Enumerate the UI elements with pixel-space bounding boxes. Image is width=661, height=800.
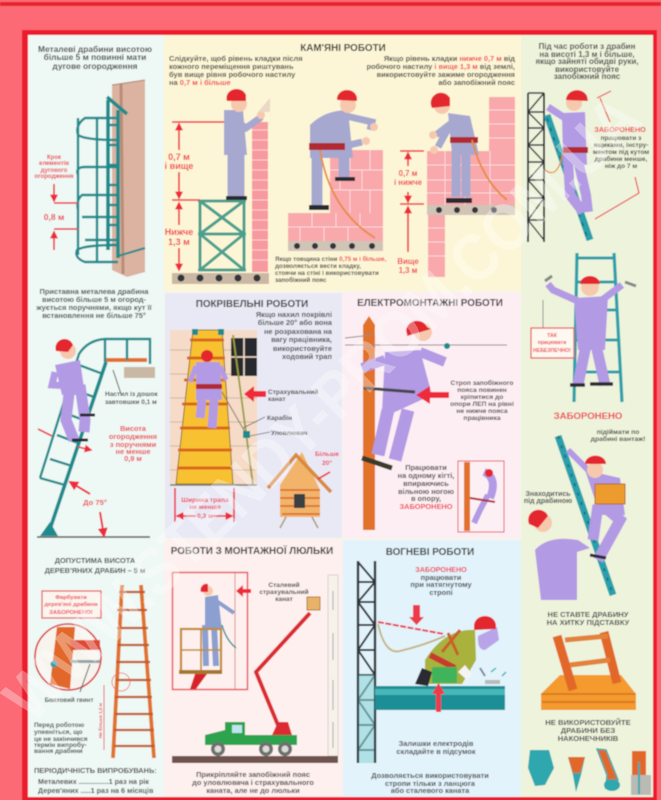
text: electrode rule xyxy=(396,739,476,756)
text: portable metal ladder rule: жується поручнями, якщо кут її xyxy=(35,303,153,312)
text: lifting load forbidden: підіймати по xyxy=(597,428,639,436)
illustration: workers with load on ladder xyxy=(528,436,625,600)
text: cradle rule: до уловлювача і страхувального xyxy=(192,778,314,787)
label: steel safety cable xyxy=(259,581,309,603)
label: cage element pitch xyxy=(34,155,78,250)
label: angle up to 75 degrees xyxy=(70,482,107,536)
text: harness rule on ladder: запобіжний пояс xyxy=(554,72,621,81)
illustration: ladder on unstable box xyxy=(541,632,636,710)
text: test date rule: термін випробу- xyxy=(34,741,87,749)
text: no ladder tips: ДРАБИНИ БЕЗ xyxy=(561,726,616,735)
heading: fire work: ВОГНЕВІ РОБОТИ xyxy=(386,547,474,558)
illustration: ladder with platform xyxy=(37,339,155,537)
text: wall thickness note: Якщо товщина стіни 0,75 м і більше, xyxy=(275,256,386,263)
text: metal ladder cage rule: Металеві драбини висотою xyxy=(38,44,152,54)
text: forbidden ladder work xyxy=(593,125,649,170)
heading: stone work: КАМ'ЯНІ РОБОТИ xyxy=(300,43,386,54)
text: test periodicity: Дерев'яних .....1 раз на 6 місяців xyxy=(38,786,154,795)
label: cage element pitch: дугового xyxy=(41,168,68,174)
text: one climber forbidden: впираючись xyxy=(403,479,449,488)
sign: dangerous xyxy=(531,328,574,358)
text: test periodicity xyxy=(34,766,157,795)
label: plank deck xyxy=(105,390,158,406)
dimension: 0.7 m and above, under 1.3 m: 1,3 м xyxy=(168,237,190,247)
sign: dangerous: ТАК xyxy=(547,333,558,339)
text: sling material rule: або сталевого каната xyxy=(391,786,470,795)
callout: painting forbidden xyxy=(42,591,101,618)
illustration: worker with harness at low wall xyxy=(427,93,515,277)
text: taut sling forbidden: працювати xyxy=(421,573,462,582)
label: railing height: Висота xyxy=(120,424,147,433)
text: lifting load forbidden: драбині вантаж! xyxy=(591,435,645,443)
text: under ladder forbidden: Знаходитись xyxy=(525,491,571,498)
text: shaky base xyxy=(547,610,630,627)
panel: cradle work background xyxy=(164,540,342,797)
label: cage element pitch: огородження xyxy=(34,174,74,180)
text: sling rule: Строп запобіжного xyxy=(451,379,513,387)
dimension: 0.7 m and above, under 1.3 m: Нижче xyxy=(165,227,193,237)
text: stone work left rule: Слідкуйте, щоб рівень кладки після xyxy=(169,54,303,63)
callout: safety rope arrow xyxy=(244,386,318,403)
icon: ladder joint magnified xyxy=(35,624,101,692)
text: forbidden ladder work: ЗАБОРОНЕНО xyxy=(594,125,646,134)
panel: fire work background xyxy=(343,540,521,797)
text: test date rule: Перед роботою xyxy=(34,721,85,729)
text: harness rule on ladder: на висоті 1,3 м і більше, xyxy=(539,50,635,59)
label: plank deck: Настил із дошок xyxy=(105,390,158,398)
text: taut sling forbidden: при натягнутому xyxy=(410,580,473,589)
text: sling rule: опори ЛЕП на рівні xyxy=(450,400,514,408)
text: roof rule: використовуйте xyxy=(273,344,332,353)
text: portable metal ladder rule: встановлення не більше 75° xyxy=(42,311,146,320)
dimension: walkway width xyxy=(175,488,234,522)
text: forbidden ladder work: ящиками, інстру- xyxy=(594,141,648,149)
callout: carabiner: Карабін xyxy=(267,414,292,422)
dimension: walkway width: не менше xyxy=(189,504,221,511)
text: sling rule xyxy=(450,379,514,422)
label: railing height xyxy=(109,424,157,463)
text: test date rule: вання драбини xyxy=(34,747,83,755)
dimension: 0.7 m and above, under 1.3 m: і вище xyxy=(165,161,193,171)
text: electrode rule: Залишки електродів xyxy=(399,739,474,748)
inset: forbidden pole climbing xyxy=(458,461,504,532)
label: railing height: огородження xyxy=(109,432,157,441)
text: sling material rule xyxy=(371,771,489,795)
text: under ladder forbidden: під драбиною xyxy=(524,497,572,505)
heading: electrical work: ЕЛЕКТРОМОНТАЖНІ РОБОТИ xyxy=(357,298,503,309)
label: steel safety cable: канат xyxy=(275,596,293,603)
text: harness rule on ladder xyxy=(535,42,639,81)
dimension: 0.7 m and lower, above 1.3 m: Вище xyxy=(397,257,419,266)
heading: wooden ladder height: ДЕРЕВ'ЯНИХ ДРАБИН – 5 м xyxy=(45,566,145,575)
dimension: 0.7 m and lower, above 1.3 m: 1,3 м xyxy=(399,266,418,275)
text: taut sling forbidden: стропі xyxy=(429,588,453,597)
text: sling rule: не нижче пояса xyxy=(456,408,508,415)
text: stone work left rule: кожного переміщення риштувань xyxy=(169,62,294,71)
text: stone work right rule: використовуйте зажиме огородження xyxy=(377,70,515,79)
heading: wooden ladder height xyxy=(45,556,145,575)
sign: dangerous: працювати xyxy=(538,340,566,346)
text: no ladder tips: НАКОНЕЧНИКІВ xyxy=(558,734,619,743)
text: harness rule on ladder: використовуйте xyxy=(555,65,620,74)
text: roof rule: Якщо нахил покрівлі xyxy=(256,310,332,319)
text: wall thickness note xyxy=(275,256,386,284)
text: metal ladder cage rule: дугове огородження xyxy=(52,61,138,71)
dimension: 0.7 m and lower, above 1.3 m: 0,7 м xyxy=(399,169,418,178)
text: one climber forbidden: на одному кігті, xyxy=(398,471,454,480)
illustration: bucket truck and building xyxy=(172,575,338,763)
text: portable metal ladder rule: висотою більше 5 м огород- xyxy=(42,295,146,304)
illustration: roof with walkway ladder and worker xyxy=(170,329,257,485)
icons: ladder tips xyxy=(528,749,651,795)
label: slope over 20 degrees: Більше xyxy=(315,450,339,458)
top red stripe xyxy=(0,2,661,6)
text: stone work right rule: або запобіжний пояс xyxy=(438,78,515,87)
label: cage element pitch: Крок xyxy=(47,155,61,161)
label: bolt: Болтовий гвинт xyxy=(45,697,93,704)
text: cradle rule: каната, але не до люльки xyxy=(206,786,300,795)
callout: rope grab xyxy=(250,430,308,437)
text: harness rule on ladder: якщо зайняті обидві руки, xyxy=(535,57,639,66)
icon: small log house xyxy=(268,452,331,528)
text: lifting load forbidden xyxy=(591,428,645,443)
text: roof rule xyxy=(256,310,333,361)
text: stone work left rule: на 0,7 м і більше xyxy=(169,78,231,87)
illustration: wooden ladder: Не більше 1,5 м xyxy=(97,702,103,738)
text: no ladder tips xyxy=(545,718,631,743)
label: slope over 20 degrees: 20° xyxy=(322,459,332,467)
text: stone work right rule xyxy=(366,54,515,87)
text: metal ladder cage rule: більше 5 м повинні мати xyxy=(44,52,146,62)
text: cradle rule xyxy=(192,770,314,795)
callout: painting forbidden: ЗАБОРОНЕНО! xyxy=(49,610,93,616)
label: plank deck: завтовшки 0,1 м xyxy=(105,399,157,406)
text: one climber forbidden xyxy=(398,463,455,511)
text: test date rule: упевніться, що xyxy=(34,728,82,736)
callout: rope grab: Уловлювач xyxy=(271,430,308,437)
label: railing height: не менше xyxy=(116,447,150,456)
callout: painting forbidden: Фарбувати xyxy=(55,594,87,601)
dimension: 0.7 m and above, under 1.3 m xyxy=(165,122,224,270)
panel: roof work background xyxy=(165,293,342,538)
callout: painting forbidden: дерев'яні драбини xyxy=(44,601,98,608)
text: roof rule: вагу працівника, xyxy=(271,335,332,344)
text: metal ladder cage rule xyxy=(38,44,152,71)
text: roof rule: не розрахована на xyxy=(264,327,333,336)
dimension: walkway width: Ширина трапа xyxy=(181,497,229,504)
label: cage element pitch: елементів xyxy=(39,161,69,167)
text: test periodicity: Металевих ...............1 раз на рік xyxy=(38,777,149,786)
text: sling rule: кріпитися до xyxy=(461,393,503,401)
callout: safety rope arrow: Страхувальний xyxy=(268,388,318,396)
text: stone work left rule xyxy=(169,54,303,87)
text: forbidden ladder work: працювати з xyxy=(601,135,642,142)
label: slope over 20 degrees xyxy=(315,450,339,479)
marker: railing height xyxy=(38,429,91,450)
text: wall thickness note: дозволяється вести кладку, xyxy=(275,263,361,270)
label: angle up to 75 degrees: До 75° xyxy=(83,498,107,507)
text: no ladder tips: НЕ ВИКОРИСТОВУЙТЕ xyxy=(545,718,631,727)
dimension: 0.7 m and above, under 1.3 m: 0,7 м xyxy=(168,152,190,162)
text: stone work right rule: робочого настилу і вище 1,3 м від землі, xyxy=(366,62,515,71)
text: portable metal ladder rule xyxy=(35,287,153,320)
panel: left ladders background xyxy=(28,35,164,797)
text: one climber forbidden: Працювати xyxy=(405,463,447,472)
label: steel safety cable: страхувальний xyxy=(259,588,309,596)
text: stone work right rule: Якщо рівень кладки нижче 0,7 м від xyxy=(384,54,515,63)
panel: stone work background xyxy=(164,35,521,291)
text: wall thickness note: запобіжний пояс xyxy=(275,277,327,284)
text: roof rule: більше 20° або вона xyxy=(258,318,333,327)
text: electrode rule: складайте в підсумок xyxy=(396,747,476,756)
text: test date rule: це не закінчився xyxy=(34,735,88,743)
text: one climber forbidden: вільною ногою xyxy=(398,487,455,496)
callout: carabiner xyxy=(243,414,292,428)
text: sling rule: працівника xyxy=(463,414,501,422)
callout: safety rope arrow: канат xyxy=(268,396,286,403)
panel: right ladders background xyxy=(521,35,653,797)
text: forbidden ladder work: ментом під кутом xyxy=(593,148,649,156)
dimension: walkway width: 0,3 м xyxy=(197,513,213,520)
dimension: 0.7 m and lower, above 1.3 m xyxy=(394,151,424,275)
sign: dangerous: НЕБЕЗПЕЧНО! xyxy=(533,348,571,354)
heading: roof work: ПОКРІВЕЛЬНІ РОБОТИ xyxy=(196,299,308,310)
illustration: worker on scaffold xyxy=(172,89,270,284)
text: roof rule: ходовий трап xyxy=(282,352,332,361)
illustration: caged ladder on I-beam xyxy=(76,80,145,277)
text: portable metal ladder rule: Приставна металева драбина xyxy=(40,287,149,296)
text: shaky base: НЕ СТАВТЕ ДРАБИНУ xyxy=(547,610,629,619)
illustration: welder on beam xyxy=(358,561,506,763)
dimension: 0.7 m and lower, above 1.3 m: і нижче xyxy=(394,178,423,187)
heading: forbidden: ЗАБОРОНЕНО xyxy=(554,411,623,422)
text: forbidden ladder work: драбини менше, xyxy=(595,155,648,163)
heading: wooden ladder height: ДОПУСТИМА ВИСОТА xyxy=(55,556,136,565)
text: test periodicity: ПЕРІОДИЧНІСТЬ ВИПРОБУВАНЬ: xyxy=(34,766,157,775)
panel: electrical work background xyxy=(343,293,520,538)
text: under ladder forbidden xyxy=(524,491,572,505)
illustration: worker on ladder against tower xyxy=(528,90,639,242)
label: steel safety cable: Сталевий xyxy=(268,581,300,589)
text: sling material rule: Дозволяється використовувати xyxy=(371,771,489,780)
illustration: worker hammering on ladder xyxy=(543,253,636,402)
illustration: worker on utility pole xyxy=(345,316,507,530)
label: cage element pitch: 0,8 м xyxy=(44,212,64,222)
label: railing height: 0,9 м xyxy=(124,454,142,463)
illustration: wooden ladder xyxy=(97,585,155,758)
text: one climber forbidden: в опору, xyxy=(411,494,441,503)
text: taut sling forbidden: ЗАБОРОНЕНО xyxy=(415,565,467,574)
text: cradle rule: Прикріпляйте запобіжний пояс xyxy=(196,770,310,779)
label: railing height: з поручнями xyxy=(110,440,157,449)
text: sling material rule: стропи тільки з ланцюга xyxy=(385,779,476,788)
illustration: worker on wall with harness xyxy=(288,90,383,251)
text: forbidden ladder work: ніж до 7 м xyxy=(605,162,637,170)
text: one climber forbidden: ЗАБОРОНЕНО xyxy=(400,502,453,511)
text: test date rule xyxy=(34,721,88,755)
text: wall thickness note: стоячи на стіні і використовувати xyxy=(275,270,379,277)
text: stone work left rule: був вище рівня робочого настилу xyxy=(169,70,296,79)
heading: cradle work: РОБОТИ З МОНТАЖНОЇ ЛЮЛЬКИ xyxy=(171,546,333,557)
illustration: cradle detail box xyxy=(172,572,251,690)
text: shaky base: НА ХИТКУ ПІДСТАВКУ xyxy=(547,618,630,627)
text: harness rule on ladder: Під час роботи з драбин xyxy=(539,42,636,51)
text: taut sling forbidden xyxy=(410,565,473,597)
text: sling rule: пояса повинен xyxy=(457,387,507,394)
